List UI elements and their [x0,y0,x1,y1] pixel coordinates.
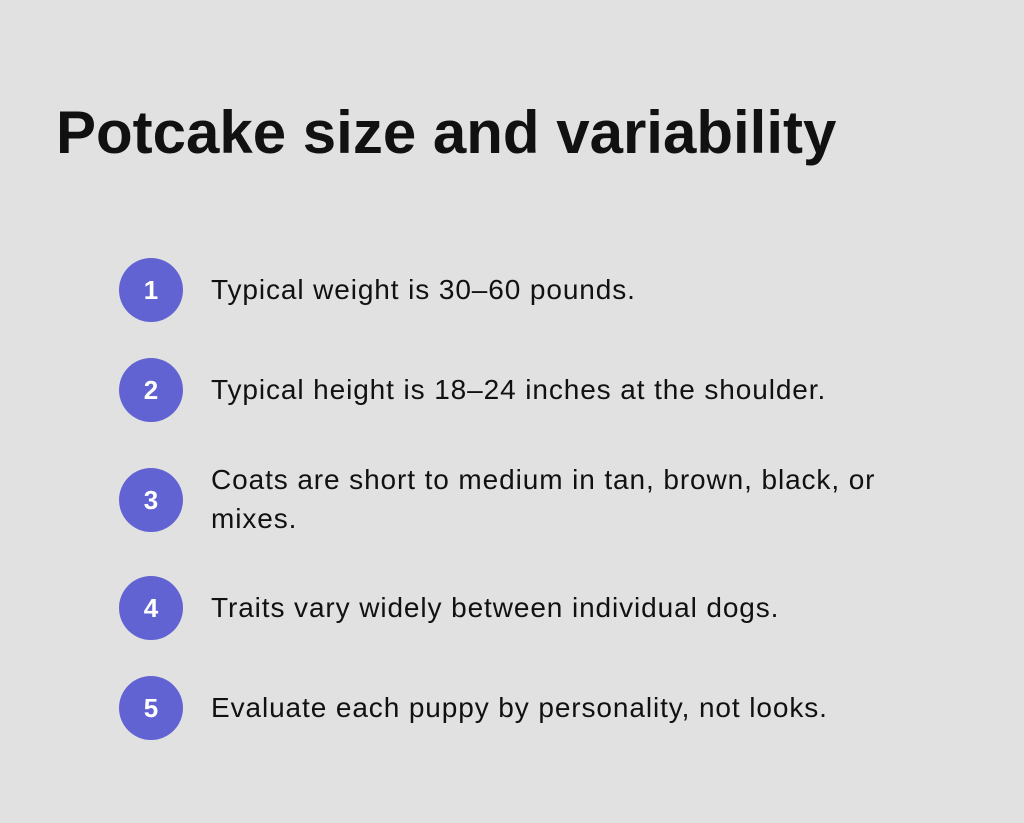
icon: number 2: 2 [144,375,158,405]
icon: number 5 [119,676,183,740]
item 5 [119,676,828,740]
title: Potcake size and variability [56,99,836,166]
icon: number 2 [119,358,183,422]
text 1: Typical weight is 30–60 pounds. [211,274,636,305]
icon: number 5: 5 [144,693,158,723]
icon: number 1: 1 [144,275,158,305]
icon: number 4: 4 [144,593,158,623]
text 5: Evaluate each puppy by personality, not looks. [211,692,828,723]
text 3: mixes. [211,503,297,534]
icon: number 1 [119,258,183,322]
icon: number 3: 3 [144,485,158,515]
item 4 [119,576,779,640]
text 4: Traits vary widely between individual dogs. [211,592,779,623]
icon: number 4 [119,576,183,640]
item 3 [119,464,875,534]
text 2: Typical height is 18–24 inches at the shoulder. [211,374,826,405]
text 3: Coats are short to medium in tan, brown, black, or [211,464,875,495]
text 3 [211,464,875,534]
icon: number 3 [119,468,183,532]
item 2 [119,358,826,422]
item 1 [119,258,636,322]
